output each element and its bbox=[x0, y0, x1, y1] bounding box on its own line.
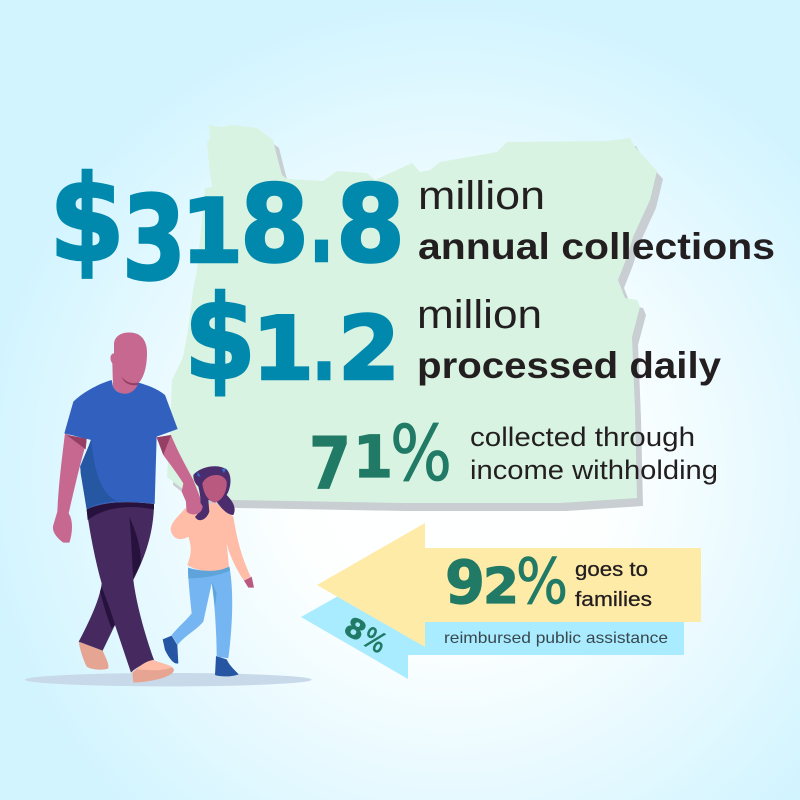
label: collected through income withholding: collected through bbox=[470, 422, 695, 452]
stat: $1.2: 1 bbox=[252, 298, 314, 400]
stat: $1.2: $ bbox=[184, 271, 256, 406]
label: collected through income withholding bbox=[470, 422, 718, 485]
stat: $318.8 bbox=[49, 151, 405, 307]
label: million processed daily bbox=[417, 293, 721, 386]
stat: $318.8: 8 bbox=[336, 163, 405, 286]
label: goes to families: goes to bbox=[575, 559, 648, 581]
stat: 71%: 1 bbox=[353, 423, 393, 491]
figure: man and girl walking bbox=[25, 332, 312, 686]
stat: 92%: 9 bbox=[445, 548, 485, 618]
stat: 71% bbox=[309, 410, 452, 505]
arrow: 92% goes to families bbox=[317, 523, 701, 647]
arrow: 8% reimbursed public assistance bbox=[301, 595, 684, 679]
stat: 71%: 7 bbox=[309, 422, 351, 505]
label: million annual collections: million bbox=[418, 174, 545, 218]
stat: $318.8: . bbox=[309, 163, 334, 286]
stat: 92%: 2 bbox=[483, 558, 519, 615]
stat: $1.2 bbox=[184, 271, 400, 406]
map: Oregon state with shadow bbox=[167, 125, 663, 511]
label: reimbursed public assistance: reimbursed public assistance bbox=[444, 630, 668, 647]
stat: 8%: 8 bbox=[338, 611, 371, 648]
label: million processed daily: processed daily bbox=[417, 345, 721, 386]
label: million processed daily: million bbox=[417, 293, 542, 337]
label: million annual collections bbox=[418, 174, 775, 267]
stat: 71%: % bbox=[390, 410, 452, 499]
stat: $318.8: $ bbox=[49, 151, 125, 289]
stat: $1.2: 2 bbox=[338, 297, 400, 400]
label: million annual collections: annual collections bbox=[418, 226, 775, 267]
stat: $1.2: . bbox=[312, 298, 336, 400]
label: goes to families bbox=[575, 559, 652, 611]
stat: 8% bbox=[338, 611, 392, 660]
stat: 8%: % bbox=[356, 622, 392, 660]
label: collected through income withholding: income withholding bbox=[470, 455, 718, 485]
stat: $318.8: 8 bbox=[240, 163, 309, 286]
stat: 92%: % bbox=[516, 545, 568, 618]
stat: 92% bbox=[445, 545, 568, 618]
stat: $318.8: 1 bbox=[181, 180, 243, 283]
label: goes to families: families bbox=[575, 589, 652, 611]
stat: $318.8: 3 bbox=[122, 172, 186, 307]
